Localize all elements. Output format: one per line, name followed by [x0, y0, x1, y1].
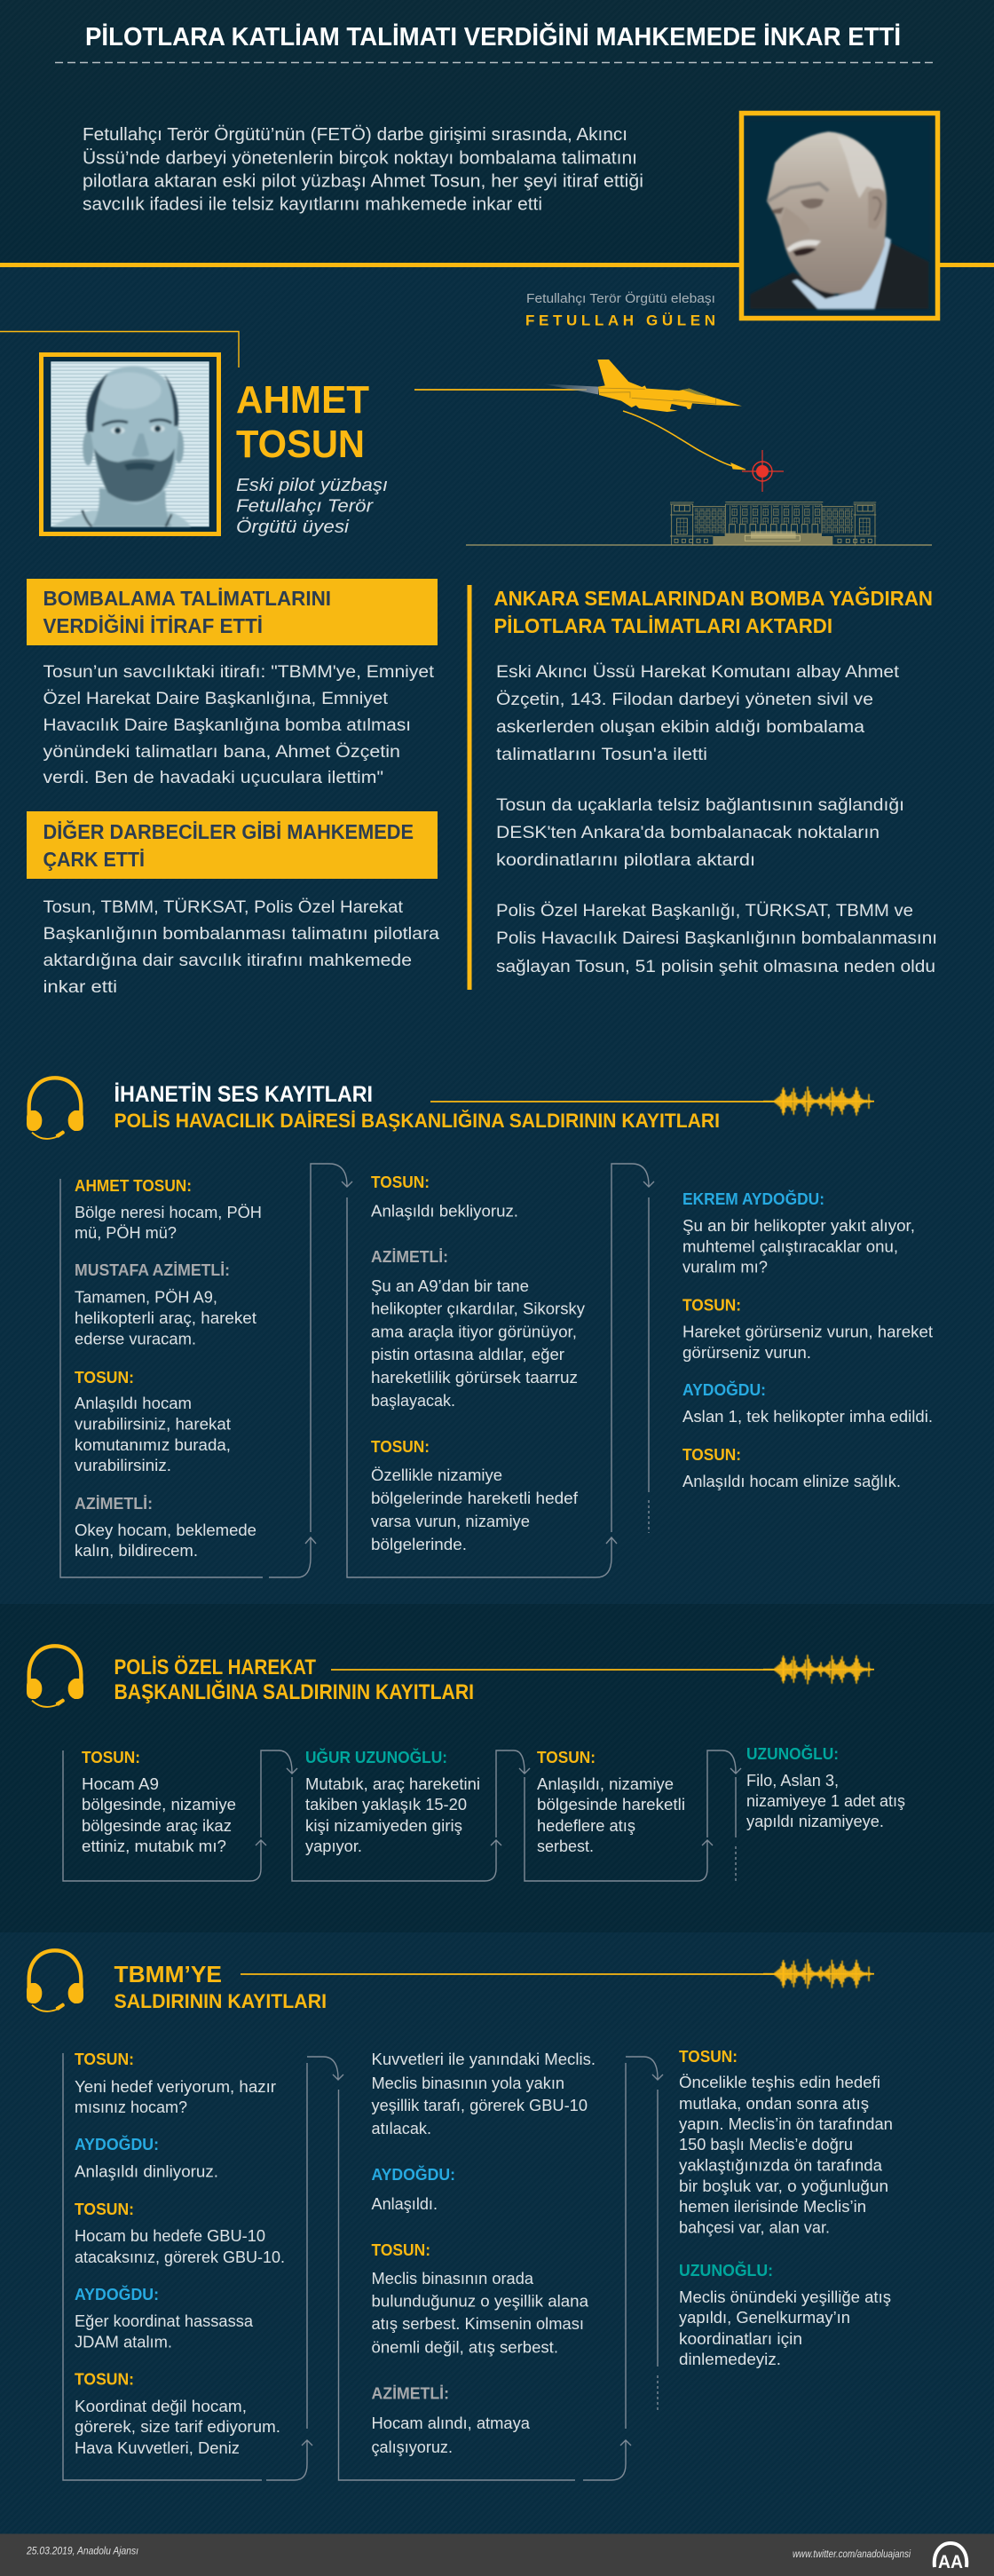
- transcript column 1: MUSTAFA AZİMETLİ:: [75, 1261, 230, 1279]
- intro text: pilotlara aktaran eski pilot yüzbaşı Ahmet Tosun, her şeyi itiraf ettiği: [83, 172, 643, 192]
- section 2: Police Special Operations recordings: [27, 1646, 905, 1881]
- illustration: bomb trajectory and target: [623, 411, 784, 492]
- transcript column 1: [82, 1749, 236, 1855]
- logo: Anadolu Ajansı: AA: [938, 2552, 963, 2572]
- transcript column 3: görürseniz vurun.: [682, 1344, 811, 1362]
- date and source: 25.03.2019, Anadolu Ajansı: [26, 2546, 138, 2556]
- transcript column 2: yeşillik tarafı, görerek GBU-10: [371, 2097, 588, 2114]
- transcript column 4: nizamiyeye 1 adet atış: [746, 1792, 905, 1810]
- transcript column 3: dinlemedeyiz.: [679, 2351, 781, 2368]
- sound wave line: [430, 1087, 874, 1116]
- transcript column 4: [746, 1744, 905, 1830]
- name: Ahmet Tosun: Eski pilot yüzbaşı: [236, 476, 388, 495]
- transcript column 2: Anlaşıldı bekliyoruz.: [371, 1202, 518, 1220]
- transcript column 1: TOSUN:: [75, 1369, 134, 1387]
- transcript column 2: takiben yaklaşık 15-20: [305, 1796, 467, 1813]
- transcript column 2: varsa vurun, nizamiye: [371, 1513, 530, 1530]
- transcript column 2: önemli değil, atış serbest.: [371, 2338, 558, 2356]
- paragraph 2: koordinatlarını pilotlara aktardı: [496, 851, 755, 870]
- heading: [114, 1655, 474, 1704]
- transcript column 1: [75, 1177, 262, 1560]
- transcript column 2: TOSUN:: [371, 2241, 430, 2259]
- transcript column 2: Özellikle nizamiye: [371, 1466, 502, 1484]
- paragraph 2: DESK'ten Ankara'da bombalanacak noktaların: [496, 824, 880, 842]
- gold divider: [0, 263, 994, 267]
- illustration: parliament building: [466, 502, 932, 545]
- transcript column 1: mısınız hocam?: [75, 2098, 187, 2116]
- transcript column 3: yaklaştığınızda ön tarafında: [679, 2157, 883, 2175]
- transcript column 2: helikopter çıkardılar, Sikorsky: [371, 1300, 585, 1317]
- transcript column 3: [682, 1189, 933, 1490]
- paragraph 3: Polis Özel Harekat Başkanlığı, TÜRKSAT, TBMM ve: [496, 902, 913, 921]
- social link: www.twitter.com/anadoluajansi: [793, 2549, 911, 2560]
- transcript column 2: UĞUR UZUNOĞLU:: [305, 1748, 447, 1766]
- paragraph 1: Özçetin, 143. Filodan darbeyi yöneten sivil ve: [496, 691, 873, 709]
- heading: [493, 586, 933, 637]
- intro text: savcılık ifadesi ile telsiz kayıtlarını mahkemede inkar etti: [83, 195, 542, 215]
- transcript column 3: hemen ilerisinde Meclis’in: [679, 2198, 866, 2216]
- heading: ANKARA SEMALARINDAN BOMBA YAĞDIRAN: [493, 586, 933, 610]
- heading: TBMM’YE: [114, 1961, 222, 1987]
- transcript column 2: Meclis binasının yola yakın: [371, 2074, 564, 2092]
- transcript column 1: ettiniz, mutabık mı?: [82, 1837, 226, 1855]
- transcript column 2: AYDOĞDU:: [371, 2165, 455, 2184]
- heading: PİLOTLARA TALİMATLARI AKTARDI: [493, 614, 832, 637]
- transcript column 3: 150 başlı Meclis’e doğru: [679, 2136, 853, 2153]
- transcript column 1: AYDOĞDU:: [75, 2135, 159, 2153]
- transcript column 1: Anlaşıldı dinliyoruz.: [75, 2162, 218, 2180]
- transcript column 2: [371, 1173, 585, 1553]
- transcript column 2: Mutabık, araç hareketini: [305, 1775, 480, 1793]
- transcript column 1: TOSUN:: [75, 2051, 134, 2068]
- transcript column 1: Hocam bu hedefe GBU-10: [75, 2227, 265, 2245]
- paragraph 2: Tosun da uçaklarla telsiz bağlantısının sağlandığı: [496, 796, 904, 815]
- footer: [0, 2533, 994, 2576]
- transcript column 3: [537, 1749, 685, 1855]
- heading: SALDIRININ KAYITLARI: [114, 1990, 327, 2012]
- panel: denial in court: [27, 811, 439, 997]
- transcript column 2: bölgelerinde hareketli hedef: [371, 1489, 579, 1507]
- transcript column 2: atış serbest. Kimsenin olması: [371, 2315, 584, 2333]
- caption: Fetullah Gülen: Fetullahçı Terör Örgütü elebaşı: [526, 290, 715, 306]
- transcript column 2: Şu an A9’dan bir tane: [371, 1277, 529, 1295]
- paragraph: Özel Harekat Daire Başkanlığına, Emniyet: [43, 690, 389, 708]
- heading: [114, 1082, 720, 1132]
- heading box: VERDİĞİNİ İTİRAF ETTİ: [43, 613, 263, 637]
- illustration: jet: [414, 360, 742, 412]
- transcript column 1: Bölge neresi hocam, PÖH: [75, 1204, 262, 1221]
- transcript column 3: Meclis önündeki yeşilliğe atış: [679, 2288, 891, 2306]
- paragraph 1: [496, 663, 900, 764]
- transcript column 2: Meclis binasının orada: [371, 2270, 534, 2288]
- transcript column 3: AYDOĞDU:: [682, 1380, 766, 1399]
- transcript column 2: pistin ortasına aldılar, eğer: [371, 1346, 564, 1363]
- heading: [114, 1961, 327, 2012]
- transcript column 3: mutlaka, ondan sonra atış: [679, 2095, 869, 2113]
- transcript column 3: TOSUN:: [682, 1446, 741, 1464]
- transcript column 3: bir boşluk var, o yoğunluğun: [679, 2177, 888, 2195]
- paragraph 3: sağlayan Tosun, 51 polisin şehit olmasına neden oldu: [496, 958, 935, 976]
- photo: Fetullah Gülen: [742, 114, 937, 318]
- heading: İHANETİN SES KAYITLARI: [114, 1082, 373, 1107]
- transcript column 3: bölgesinde hareketli: [537, 1796, 685, 1813]
- caption: Fetullah Gülen: FETULLAH GÜLEN: [525, 312, 715, 328]
- paragraph: Havacılık Daire Başkanlığına bomba atılması: [43, 716, 411, 735]
- transcript column 2: TOSUN:: [371, 1438, 430, 1456]
- transcript column 1: Koordinat değil hocam,: [75, 2398, 247, 2415]
- transcript column 3: Aslan 1, tek helikopter imha edildi.: [682, 1408, 933, 1426]
- transcript column 1: AHMET TOSUN:: [75, 1177, 192, 1195]
- transcript column 3: TOSUN:: [537, 1749, 596, 1766]
- section 1: Police Aviation recordings: [27, 1078, 933, 1577]
- transcript column 2: AZİMETLİ:: [371, 1248, 448, 1266]
- transcript column 2: başlayacak.: [371, 1392, 455, 1410]
- transcript column 1: bölgesinde araç ikaz: [82, 1817, 232, 1835]
- transcript column 1: AYDOĞDU:: [75, 2285, 159, 2303]
- transcript column 3: Öncelikle teşhis edin hedefi: [679, 2074, 880, 2091]
- paragraph 1: Eski Akıncı Üssü Harekat Komutanı albay Ahmet: [496, 663, 900, 682]
- transcript column 3: EKREM AYDOĞDU:: [682, 1189, 824, 1208]
- heading box: ÇARK ETTİ: [43, 848, 145, 871]
- transcript column 2: yapıyor.: [305, 1837, 362, 1855]
- icon: headset: [27, 1950, 83, 2011]
- intro text: Üssü’nde darbeyi yönetenlerin birçok noktayı bombalama talimatını: [83, 149, 637, 169]
- transcript column 2: [371, 2051, 596, 2456]
- transcript column 1: vurabilirsiniz.: [75, 1457, 171, 1474]
- transcript column 2: atılacak.: [371, 2120, 431, 2137]
- transcript column 1: TOSUN:: [75, 2201, 134, 2218]
- paragraph 3: Polis Havacılık Dairesi Başkanlığının bombalanmasını: [496, 929, 937, 948]
- paragraph: inkar etti: [43, 978, 117, 997]
- transcript column 1: mü, PÖH mü?: [75, 1224, 177, 1242]
- paragraph 3: [496, 902, 937, 976]
- heading box: BOMBALAMA TALİMATLARINI: [43, 587, 331, 610]
- transcript column 3: Şu an bir helikopter yakıt alıyor,: [682, 1217, 915, 1235]
- transcript column 3: koordinatları için: [679, 2330, 802, 2348]
- name: Ahmet Tosun: AHMET: [236, 378, 369, 422]
- paragraph 1: talimatlarını Tosun'a iletti: [496, 746, 707, 764]
- transcript column 3: serbest.: [537, 1837, 594, 1855]
- transcript column 3: Anlaşıldı hocam elinize sağlık.: [682, 1473, 901, 1490]
- name: Ahmet Tosun: Örgütü üyesi: [236, 518, 350, 537]
- transcript column 1: kalın, bildirecem.: [75, 1542, 198, 1560]
- sound wave line: [331, 1655, 874, 1684]
- transcript column 1: atacaksınız, görerek GBU-10.: [75, 2248, 285, 2266]
- name: Ahmet Tosun: [236, 378, 388, 537]
- heading box: DİĞER DARBECİLER GİBİ MAHKEMEDE: [43, 819, 414, 843]
- transcript column 4: Filo, Aslan 3,: [746, 1772, 839, 1790]
- paragraph: Tosun’un savcılıktaki itirafı: "TBMM'ye, Emniyet: [43, 663, 435, 682]
- panel: bombing instructions confession: [27, 579, 438, 787]
- paragraph: [43, 898, 439, 997]
- transcript column 1: bölgesinde, nizamiye: [82, 1796, 236, 1813]
- flow connectors: [63, 2053, 663, 2480]
- corner line: [0, 332, 239, 367]
- icon: headset: [27, 1646, 83, 1707]
- name: Ahmet Tosun: Fetullahçı Terör: [236, 497, 374, 517]
- paragraph: aktardığına dair savcılık itirafını mahkemede: [43, 952, 412, 970]
- transcript column 1: ederse vuracam.: [75, 1330, 196, 1347]
- section 3: TBMM recordings: [27, 1950, 893, 2480]
- transcript column 2: Anlaşıldı.: [371, 2195, 438, 2213]
- transcript column 1: Eğer koordinat hassassa: [75, 2312, 254, 2330]
- paragraph 2: [496, 796, 904, 870]
- transcript column 1: Tamamen, PÖH A9,: [75, 1289, 217, 1307]
- transcript column 1: TOSUN:: [75, 2370, 134, 2388]
- paragraph: Tosun, TBMM, TÜRKSAT, Polis Özel Harekat: [43, 898, 404, 917]
- transcript column 2: AZİMETLİ:: [371, 2384, 449, 2402]
- logo: Anadolu Ajansı: [935, 2543, 966, 2572]
- flow connectors: [63, 1750, 741, 1881]
- heading: POLİS ÖZEL HAREKAT: [114, 1655, 316, 1679]
- transcript column 1: helikopterli araç, hareket: [75, 1309, 256, 1327]
- transcript column 1: Yeni hedef veriyorum, hazır: [75, 2078, 276, 2096]
- heading box: [27, 811, 438, 879]
- heading: BAŞKANLIĞINA SALDIRININ KAYITLARI: [114, 1679, 474, 1704]
- transcript column 2: [305, 1748, 480, 1855]
- paragraph: yönündeki talimatları bana, Ahmet Özçetin: [43, 743, 400, 762]
- transcript column 2: bulunduğunuz o yeşillik alana: [371, 2292, 589, 2310]
- transcript column 1: TOSUN:: [82, 1749, 140, 1766]
- intro text: [83, 125, 643, 215]
- transcript column 2: Hocam alındı, atmaya: [371, 2414, 531, 2432]
- transcript column 1: Hocam A9: [82, 1775, 159, 1793]
- transcript column 1: JDAM atalım.: [75, 2333, 172, 2351]
- transcript column 3: vuralım mı?: [682, 1259, 768, 1276]
- transcript column 3: yapın. Meclis’in ön tarafından: [679, 2115, 893, 2133]
- transcript column 1: Anlaşıldı hocam: [75, 1395, 192, 1412]
- paragraph: Başkanlığının bombalanması talimatını pilotlara: [43, 925, 439, 944]
- name: Ahmet Tosun: TOSUN: [236, 423, 365, 466]
- vertical divider: [467, 585, 472, 990]
- transcript column 3: bahçesi var, alan var.: [679, 2219, 830, 2237]
- transcript column 1: komutanımız burada,: [75, 1436, 231, 1454]
- panel: orders relayed to pilots: [493, 586, 937, 976]
- paragraph: verdi. Ben de havadaki uçuculara ilettim": [43, 769, 383, 787]
- transcript column 3: [679, 2048, 893, 2368]
- paragraph: [43, 663, 435, 787]
- transcript column 2: çalışıyoruz.: [371, 2438, 453, 2456]
- heading: POLİS HAVACILIK DAİRESİ BAŞKANLIĞINA SALDIRININ KAYITLARI: [114, 1110, 720, 1132]
- paragraph 1: askerlerden oluşan ekibin aldığı bombalama: [496, 718, 864, 737]
- transcript column 4: yapıldı nizamiyeye.: [746, 1813, 884, 1830]
- flow connectors: [60, 1164, 654, 1577]
- transcript column 3: Anlaşıldı, nizamiye: [537, 1775, 674, 1793]
- heading box: [27, 579, 438, 645]
- transcript column 2: Kuvvetleri ile yanındaki Meclis.: [371, 2051, 596, 2068]
- transcript column 4: UZUNOĞLU:: [746, 1744, 839, 1763]
- photo: Ahmet Tosun: [41, 355, 218, 534]
- transcript column 3: UZUNOĞLU:: [679, 2261, 773, 2280]
- transcript column 1: görerek, size tarif ediyorum.: [75, 2418, 280, 2436]
- transcript column 2: ama araçla itiyor görünüyor,: [371, 1323, 577, 1340]
- transcript column 1: Hava Kuvvetleri, Deniz: [75, 2439, 240, 2457]
- transcript column 2: hareketlilik görürsek taarruz: [371, 1369, 578, 1387]
- transcript column 3: Hareket görürseniz vurun, hareket: [682, 1323, 933, 1340]
- sound wave line: [241, 1959, 874, 1988]
- transcript column 1: Okey hocam, beklemede: [75, 1521, 256, 1539]
- transcript column 1: AZİMETLİ:: [75, 1495, 153, 1513]
- transcript column 2: TOSUN:: [371, 1173, 430, 1191]
- icon: headset: [27, 1078, 83, 1139]
- transcript column 2: kişi nizamiyeden giriş: [305, 1817, 462, 1835]
- intro text: Fetullahçı Terör Örgütü’nün (FETÖ) darbe girişimi sırasında, Akıncı: [83, 125, 627, 145]
- transcript column 3: muhtemel çalıştıracaklar onu,: [682, 1237, 898, 1255]
- transcript column 3: TOSUN:: [682, 1296, 741, 1314]
- transcript column 3: hedeflere atış: [537, 1817, 635, 1835]
- transcript column 1: vurabilirsiniz, harekat: [75, 1415, 231, 1433]
- caption: Fetullah Gülen: [525, 290, 715, 328]
- transcript column 1: [75, 2051, 285, 2457]
- transcript column 2: bölgelerinde.: [371, 1536, 467, 1553]
- transcript column 3: yapıldı, Genelkurmay’ın: [679, 2309, 850, 2327]
- transcript column 3: TOSUN:: [679, 2048, 738, 2066]
- title: PİLOTLARA KATLİAM TALİMATI VERDİĞİNİ MAHKEMEDE İNKAR ETTİ: [85, 21, 901, 51]
